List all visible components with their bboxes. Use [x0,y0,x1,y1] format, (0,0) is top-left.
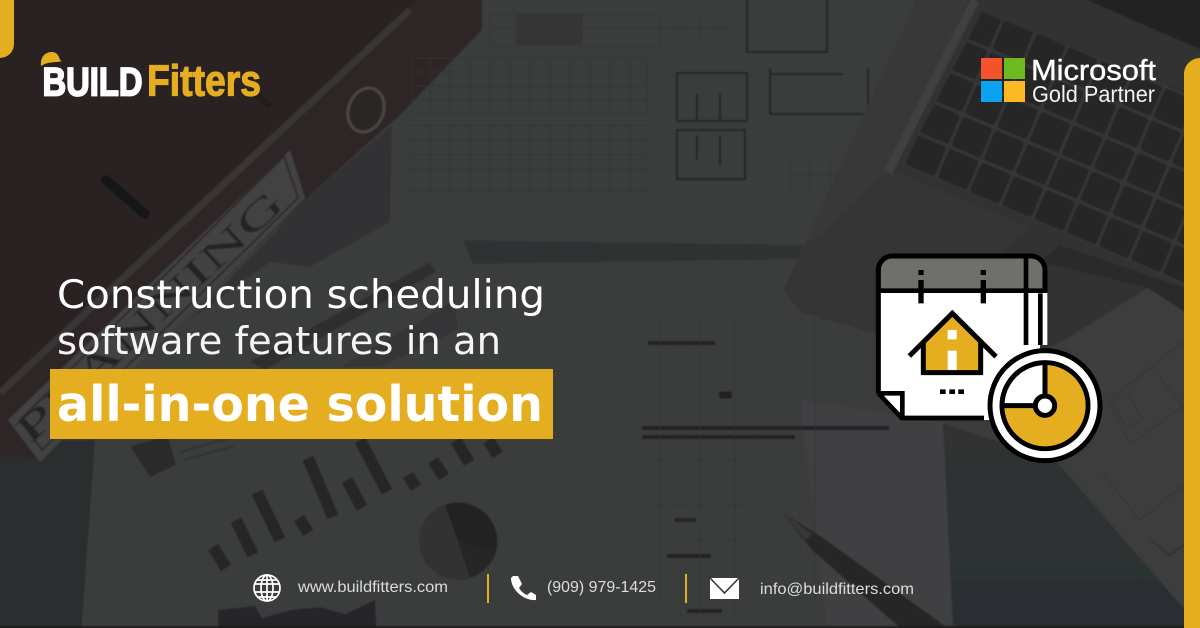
side accent bar: right [1184,58,1200,628]
divider [487,574,489,603]
laptop body [783,0,1200,370]
teal gap beside binder [190,125,392,320]
logo: BuildFitters [41,52,261,106]
bar chart on paper [213,440,498,568]
calendar page [878,290,1047,420]
icon: envelope [710,578,739,599]
logo word: Fitters: Fitters [147,56,261,106]
logo word: BUILD: BUILD [42,60,142,104]
calendar header [878,256,1045,290]
dark stripes [250,262,436,370]
badge: Microsoft Gold Partner [981,55,1156,107]
floor plan sketches [408,14,840,195]
binder spine highlight [0,10,410,393]
footer contact bar [254,574,914,603]
keyboard [903,12,1200,290]
headline [50,273,553,439]
headline highlight text: all-in-one solution [57,376,543,433]
text: website: www.buildfitters.com [297,579,448,596]
clock [990,351,1100,461]
dark band under keyboard [1040,245,1200,336]
gantt chart [620,320,889,620]
house [909,313,996,373]
pen [782,512,948,628]
laptop deck [890,0,1200,305]
text: Gold Partner: Gold Partner [1032,81,1155,107]
icon: Microsoft squares [981,58,1025,102]
right sheet plan lines [1100,340,1190,555]
corner accent: top left [0,0,14,58]
calendar rings [921,270,983,303]
dots [940,389,964,394]
binder-side text sheet table [130,300,458,477]
highlight bar [50,369,553,439]
pie chart on paper [419,502,497,580]
text: Microsoft: Microsoft [1031,55,1156,87]
calendar bottom edge and fold [878,393,984,418]
binder cover [0,0,440,410]
dark top-right corner [1087,0,1200,58]
bottom edge [0,626,1200,628]
icon: globe [254,575,280,601]
headline line 2: software features in an [57,319,501,363]
binder label plate [8,150,305,462]
lighter paper below calendar [800,400,954,628]
icon: hard hat [41,52,62,66]
teal desk lower right [943,423,1200,628]
binder maroon edge [0,0,482,458]
lower dark chart [218,600,378,628]
icon: phone [511,576,536,600]
binder label lettering: PLANNING [7,182,292,452]
teal desk lower left [0,440,95,628]
binder ring hole [340,81,392,139]
teal strip between sheets [463,240,802,264]
text: email: info@buildfitters.com [760,581,914,598]
divider [685,574,687,603]
right paper sheet [1060,288,1200,628]
text: phone: (909) 979-1425 [547,579,656,596]
headline line 1: Construction scheduling [57,273,545,318]
binder slots [106,180,145,214]
icon: calendar with house and clock [878,256,1100,461]
